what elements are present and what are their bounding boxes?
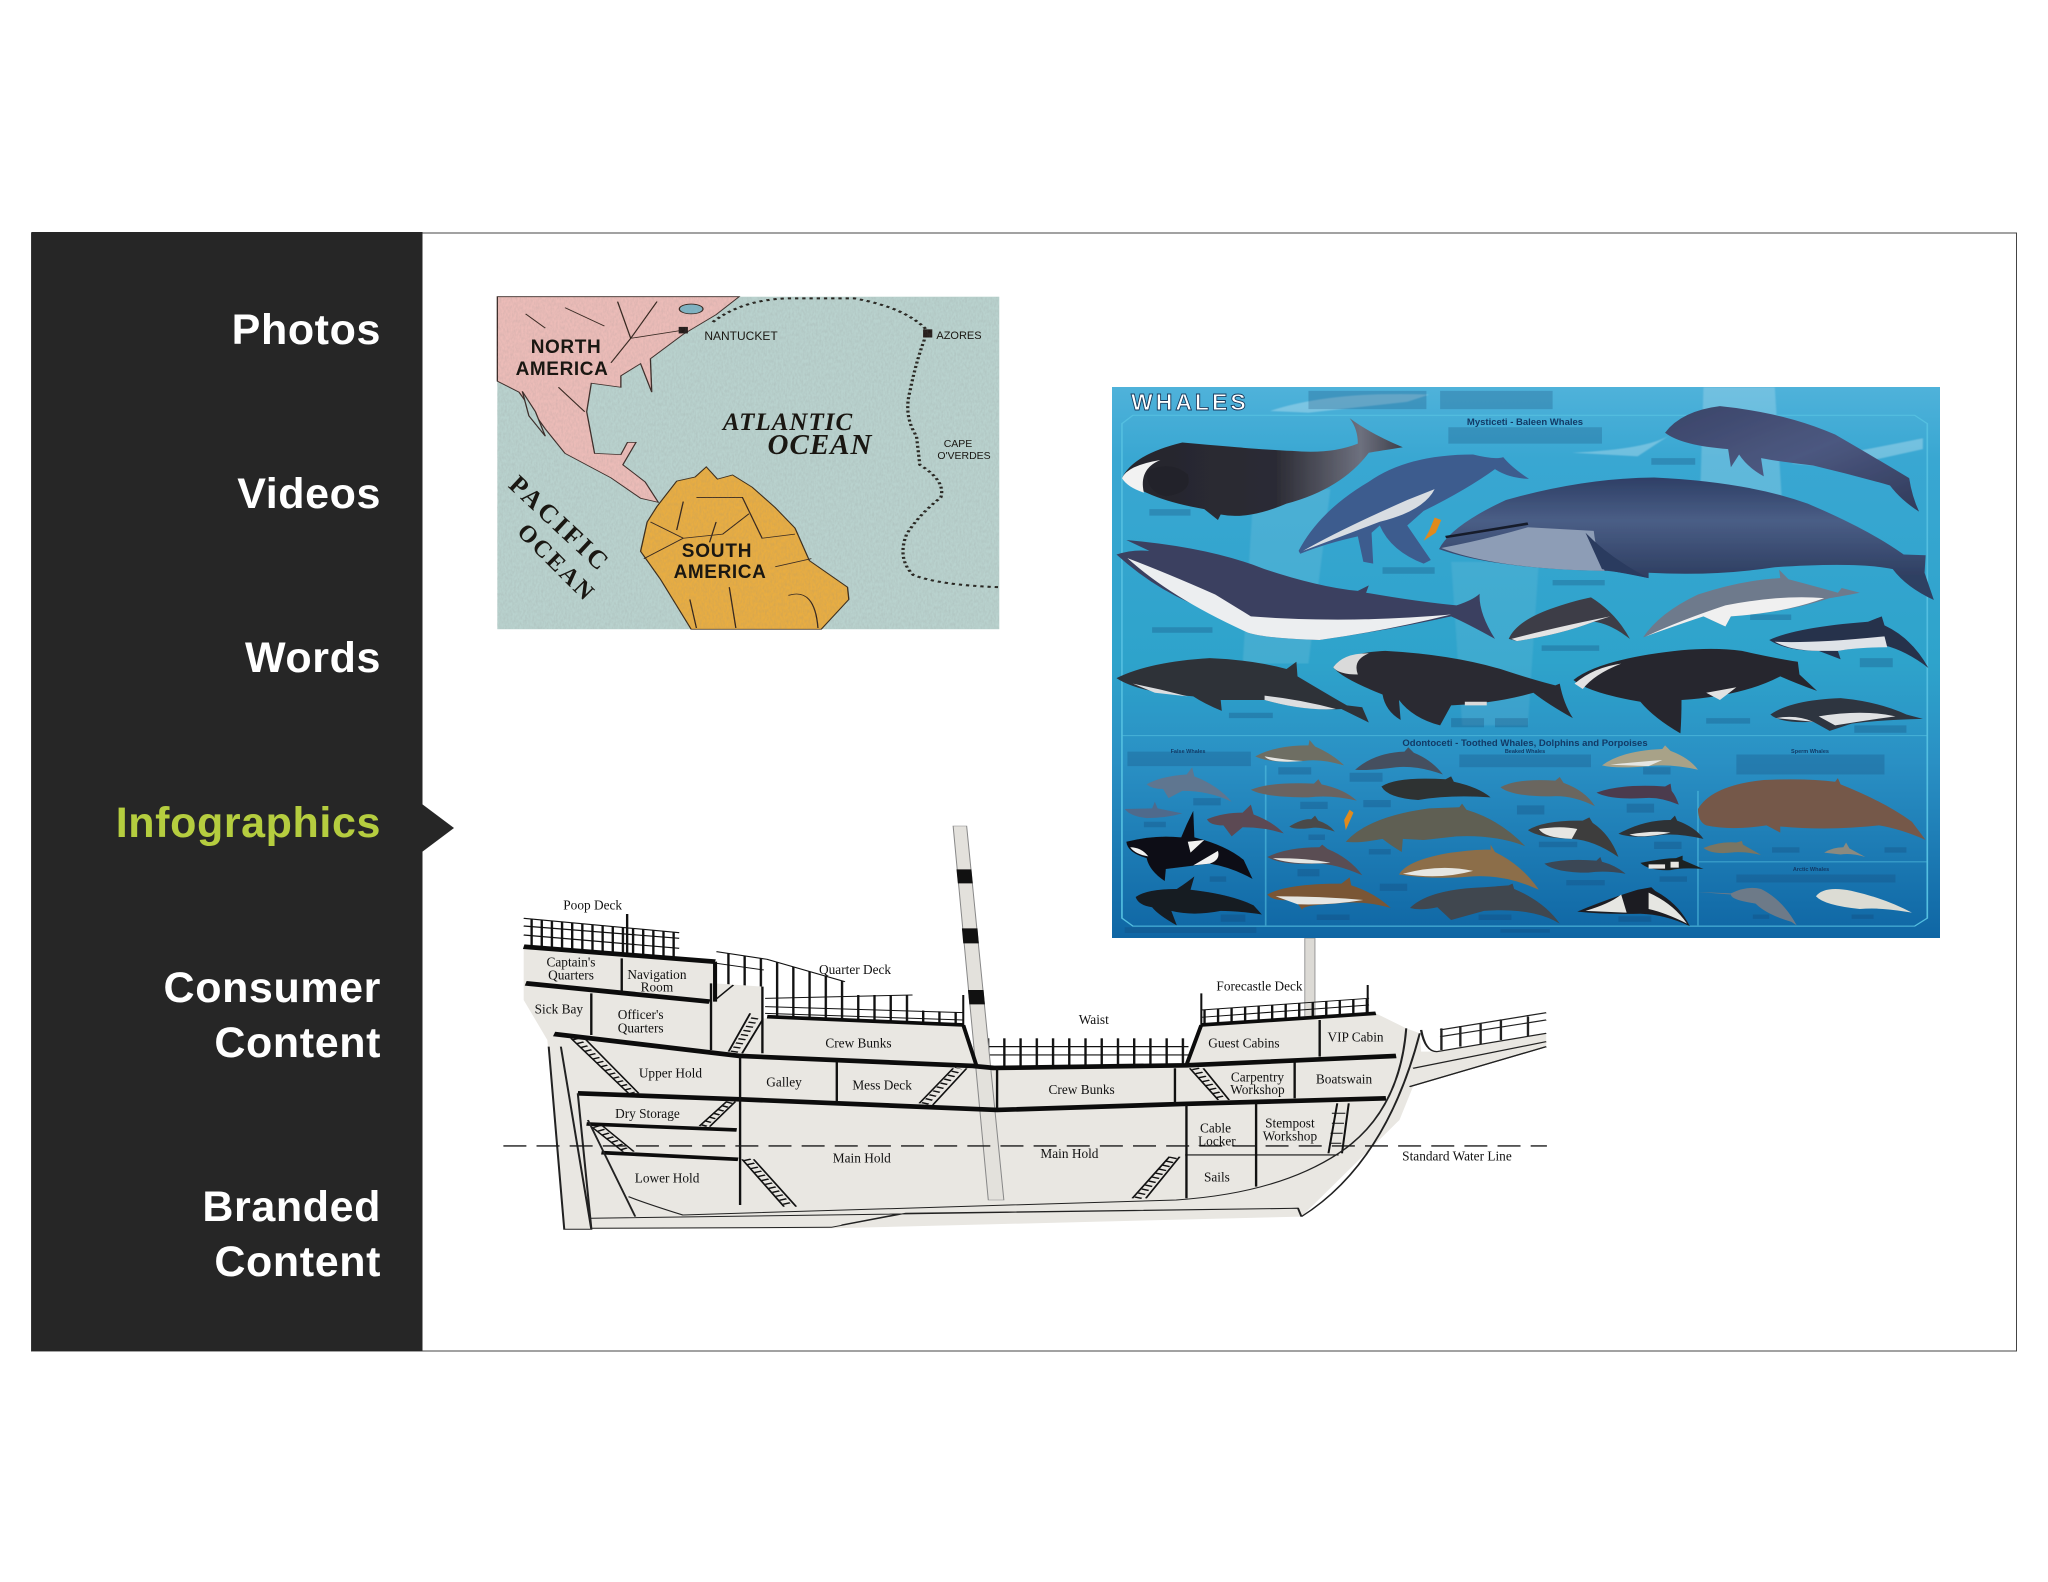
- main mast: [953, 826, 1004, 1200]
- label: Atlantic: ATLANTIC: [721, 409, 853, 436]
- label: Nantucket: NANTUCKET: [704, 329, 778, 343]
- stairways: [571, 985, 1349, 1207]
- label: Room: Room: [641, 980, 674, 995]
- whale: beluga: [1816, 889, 1912, 913]
- heading: arctic whales: Arctic Whales: [1793, 867, 1829, 873]
- label: South: SOUTH: [682, 541, 752, 562]
- label: Sick Bay: Sick Bay: [535, 1001, 583, 1016]
- label: Pacific: PACIFIC: [503, 470, 616, 578]
- label: Officer's Quarters: Quarters: [618, 1020, 664, 1035]
- bow rail: [1410, 1013, 1546, 1087]
- deck beams: [524, 947, 1396, 1159]
- route: dotted voyage line: [713, 298, 999, 587]
- Baja peninsula gulf: [522, 391, 545, 436]
- railing: waist: [973, 1038, 1188, 1067]
- label: Main Hold aft: Main Hold: [833, 1151, 891, 1166]
- label: Azores: AZORES: [936, 330, 982, 342]
- label: Waist: Waist: [1079, 1012, 1109, 1027]
- label: Ocean: OCEAN: [512, 519, 600, 607]
- heading: sperm whales: Sperm Whales: [1791, 749, 1829, 755]
- label: Cable: Cable: [1200, 1120, 1231, 1135]
- label: Mess Deck: Mess Deck: [852, 1078, 912, 1093]
- active arrow: [422, 804, 454, 852]
- railing: forecastle deck: [1201, 985, 1369, 1025]
- label: Forecastle Deck: Forecastle Deck: [1216, 979, 1303, 994]
- light rays: [1243, 387, 1923, 725]
- whale captions: [1144, 458, 1906, 922]
- landmass: North America: [497, 297, 739, 502]
- label: Crew Bunks lower: Crew Bunks: [1049, 1082, 1115, 1097]
- heading: baleen whales: Mysticeti - Baleen Whales: [1467, 417, 1583, 428]
- label: Standard Water Line: Standard Water Line: [1402, 1149, 1512, 1164]
- whale: minke lower: [1770, 698, 1923, 731]
- whale: sei: [1769, 616, 1928, 668]
- label: Boatswain: Boatswain: [1316, 1071, 1372, 1086]
- label: Main Hold fore: Main Hold: [1040, 1146, 1099, 1161]
- nav item: Branded Content: Content: [214, 1238, 381, 1286]
- divers: [1344, 517, 1441, 830]
- label: Poop Deck: Poop Deck: [563, 897, 622, 912]
- nav item: Consumer Content: Consumer: [164, 964, 381, 1012]
- forward mast: [1305, 938, 1315, 1182]
- whale: orca: [1126, 811, 1253, 881]
- bulkheads: [591, 958, 1339, 1205]
- slide frame: [32, 233, 2016, 1351]
- nav item: Consumer Content: Content: [214, 1019, 381, 1067]
- keel and hull framing: [549, 1028, 1546, 1229]
- ship cross-section diagram: [503, 826, 1547, 1229]
- label: Galley: Galley: [766, 1075, 802, 1090]
- toothed whales group: [1125, 740, 1865, 926]
- label: Navigation: Navigation: [627, 967, 687, 982]
- poster inner border: [1122, 415, 1927, 926]
- whale: pygmy right: [1116, 658, 1369, 723]
- map image: [497, 297, 999, 629]
- whale: bowhead: [1122, 418, 1403, 520]
- label: Carpentry: Carpentry: [1231, 1069, 1284, 1084]
- whale: humpback: [1299, 455, 1529, 564]
- water line: [503, 1144, 1547, 1148]
- whale: blue: [1439, 477, 1934, 600]
- rivers and borders: [526, 302, 818, 628]
- whale: false killer: [1136, 876, 1262, 925]
- label: O'Verdes: O'VERDES: [937, 450, 991, 462]
- heading: beaked whales: Beaked Whales: [1505, 749, 1545, 755]
- whale: right whale 2: [1573, 649, 1817, 733]
- hull silhouette: [524, 947, 1546, 1229]
- label: Upper Hold: Upper Hold: [639, 1065, 702, 1080]
- sidebar panel: [32, 232, 454, 1351]
- railing: quarter deck: [716, 952, 963, 1025]
- whale: sperm: [1698, 778, 1926, 840]
- label: Stempost Workshop: Workshop: [1263, 1129, 1317, 1144]
- heading: false whales: False Whales: [1171, 749, 1205, 755]
- label: Carpentry Workshop: Workshop: [1230, 1082, 1285, 1097]
- nav item: Branded Content: Branded: [202, 1183, 381, 1231]
- map paper texture: [497, 297, 999, 629]
- label: Stempost: Stempost: [1265, 1115, 1315, 1130]
- whale: minke: [1643, 570, 1860, 637]
- label: Crew Bunks upper: Crew Bunks: [825, 1035, 892, 1050]
- label: Quarter Deck: Quarter Deck: [819, 962, 891, 977]
- landmass: South America: [641, 467, 849, 629]
- whale: small baleen: [1509, 597, 1630, 641]
- label: Cable Locker: Locker: [1198, 1134, 1236, 1149]
- label: Quarters: Quarters: [548, 968, 594, 983]
- whale: fin: [1116, 540, 1495, 640]
- nav item: Photos: Photos: [232, 306, 381, 354]
- poster text blocks: [1125, 391, 1895, 933]
- heading: toothed whales: Odontoceti - Toothed Whales, Dolphins and Porpoises: [1402, 738, 1648, 749]
- nav item: Infographics (active): Infographics: [116, 799, 381, 847]
- label: America: AMERICA: [674, 562, 766, 583]
- whale: gray: [1665, 406, 1919, 512]
- label: VIP Cabin: VIP Cabin: [1327, 1029, 1384, 1044]
- label: North America: NORTH: [531, 337, 601, 358]
- label: Cape: CAPE: [944, 438, 972, 450]
- label: Officer's: Officer's: [618, 1007, 664, 1022]
- nav item: Videos: Videos: [237, 470, 381, 518]
- nav item: Words: Words: [245, 634, 381, 682]
- label: America: AMERICA: [516, 359, 608, 380]
- label: Ocean: OCEAN: [768, 429, 873, 461]
- label: Sails: Sails: [1204, 1169, 1230, 1184]
- whales poster: [1112, 387, 1940, 938]
- poster title: WHALES: [1131, 389, 1249, 415]
- label: Dry Storage: Dry Storage: [615, 1106, 680, 1121]
- whale: bellies and markings: [1265, 756, 1687, 924]
- whale: right whale: [1333, 651, 1573, 725]
- label: Captain's Quarters: Captain's: [547, 955, 596, 970]
- label: Lower Hold: Lower Hold: [635, 1171, 700, 1186]
- railing: poop deck: [524, 914, 679, 958]
- label: Guest Cabins: Guest Cabins: [1208, 1035, 1280, 1050]
- whale: narwhal: [1698, 888, 1797, 925]
